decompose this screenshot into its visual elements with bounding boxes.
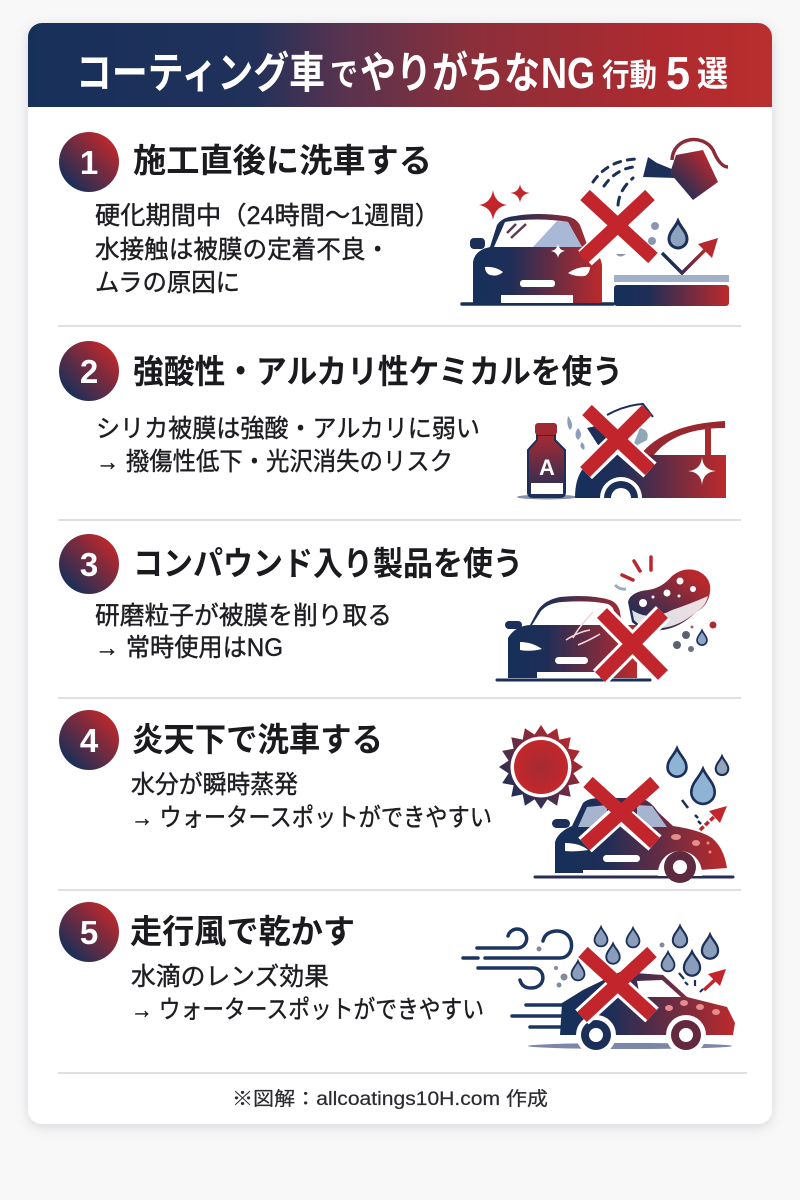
body text 4: → ウォータースポットができやすい bbox=[131, 804, 492, 832]
body text 2 bbox=[96, 415, 480, 476]
heading 5: 走行風で乾かす bbox=[130, 913, 355, 950]
body text 3: → 常時使用はNG bbox=[95, 634, 283, 662]
body text 4: 水分が瞬時蒸発 bbox=[131, 771, 298, 799]
badge 3 bbox=[59, 534, 119, 594]
title: 選 bbox=[697, 55, 728, 94]
icon: sun and car bbox=[499, 725, 733, 883]
body text 1: 水接触は被膜の定着不良・ bbox=[95, 236, 390, 264]
badge 2: 2 bbox=[80, 353, 98, 390]
body text 3: 研磨粒子が被膜を削り取る bbox=[95, 602, 392, 630]
badge 5 bbox=[59, 902, 119, 962]
footer credit: ※図解：allcoatings10H.com 作成 bbox=[232, 1088, 548, 1110]
title: で bbox=[330, 56, 358, 93]
icon: red cross bbox=[585, 782, 655, 845]
panel: item 5 bbox=[59, 902, 735, 1055]
title: NG bbox=[541, 49, 595, 98]
badge 5: 5 bbox=[80, 914, 98, 951]
icon: wind and car with droplets bbox=[463, 926, 735, 1055]
panel: item 1 bbox=[59, 132, 729, 306]
title: コーティング車 bbox=[76, 50, 325, 98]
header banner bbox=[28, 23, 772, 107]
body text 5: 水滴のレンズ効果 bbox=[131, 963, 329, 991]
icon: car with watering can bbox=[462, 140, 729, 306]
panel: item 4 bbox=[59, 710, 733, 883]
body text 1: 硬化期間中（24時間〜1週間） bbox=[95, 202, 440, 230]
icon: car and compound sponge bbox=[497, 557, 716, 680]
badge 1 bbox=[59, 132, 119, 192]
title bbox=[76, 47, 728, 99]
body text 5: → ウォータースポットができやすい bbox=[131, 996, 484, 1024]
title: やりがちな bbox=[360, 50, 540, 98]
panel: item 2 bbox=[59, 341, 726, 500]
badge 2 bbox=[59, 341, 119, 401]
body text 3 bbox=[95, 602, 392, 662]
icon: red cross bbox=[585, 410, 650, 472]
body text 2: → 撥傷性低下・光沢消失のリスク bbox=[96, 448, 453, 476]
panel: item 3 bbox=[59, 534, 716, 680]
body text 1 bbox=[95, 202, 440, 297]
title: 5 bbox=[666, 47, 690, 99]
icon: red cross bbox=[600, 613, 663, 677]
heading 1: 施工直後に洗車する bbox=[133, 142, 432, 179]
title: 行動 bbox=[602, 58, 657, 93]
badge 4 bbox=[59, 710, 119, 770]
body text 2: シリカ被膜は強酸・アルカリに弱い bbox=[96, 415, 480, 443]
body text 1: ムラの原因に bbox=[95, 269, 240, 297]
badge 1: 1 bbox=[80, 144, 98, 181]
body text 5 bbox=[131, 963, 484, 1024]
badge 4: 4 bbox=[80, 722, 99, 759]
icon: chemical bottle and car bbox=[517, 404, 726, 500]
heading 4: 炎天下で洗車する bbox=[132, 721, 383, 758]
body text 4 bbox=[131, 771, 492, 832]
icon: red cross bbox=[583, 195, 653, 258]
badge 3: 3 bbox=[80, 546, 98, 583]
icon: red cross bbox=[582, 952, 652, 1017]
heading 3: コンパウンド入り製品を使う bbox=[133, 545, 523, 582]
heading 2: 強酸性・アルカリ性ケミカルを使う bbox=[133, 353, 623, 390]
icon: chemical bottle and car: A bbox=[539, 455, 555, 480]
